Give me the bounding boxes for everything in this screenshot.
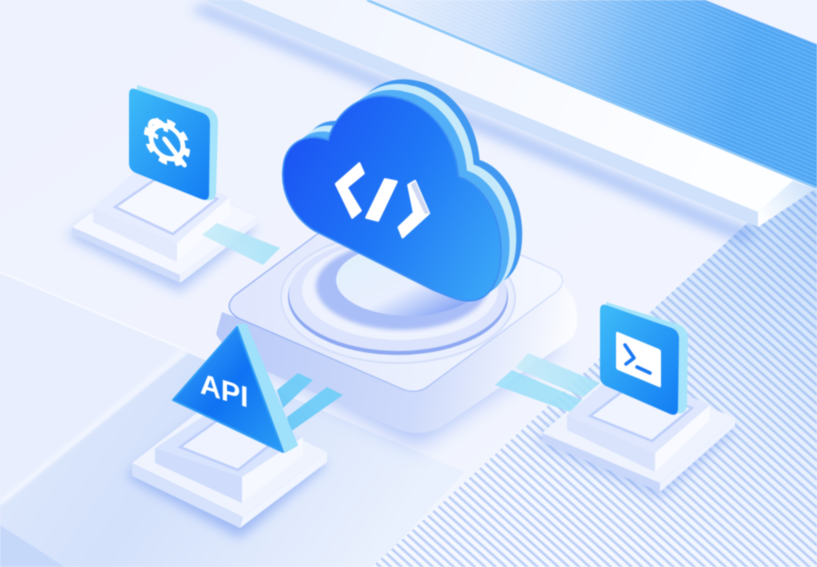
upper white plate <box>190 0 815 244</box>
API triangle <box>173 325 297 452</box>
tool connector <box>202 223 280 265</box>
icon: terminal window <box>616 332 661 387</box>
lower left plate <box>0 272 465 567</box>
API connector bars <box>277 373 343 432</box>
API label: API <box>200 368 248 414</box>
ring stack <box>281 233 515 363</box>
icon: gear and wrench <box>147 116 187 168</box>
tool card <box>129 85 218 200</box>
terminal card <box>600 302 688 415</box>
striped floor <box>372 184 817 567</box>
tool pedestal <box>66 165 257 292</box>
API pedestal <box>126 398 327 538</box>
terminal pedestal <box>536 367 735 498</box>
central platform <box>216 194 577 445</box>
terminal connector bars <box>495 353 600 412</box>
icon: code brackets <box>336 163 429 237</box>
cloud <box>283 79 522 301</box>
blue striped band <box>367 0 817 188</box>
